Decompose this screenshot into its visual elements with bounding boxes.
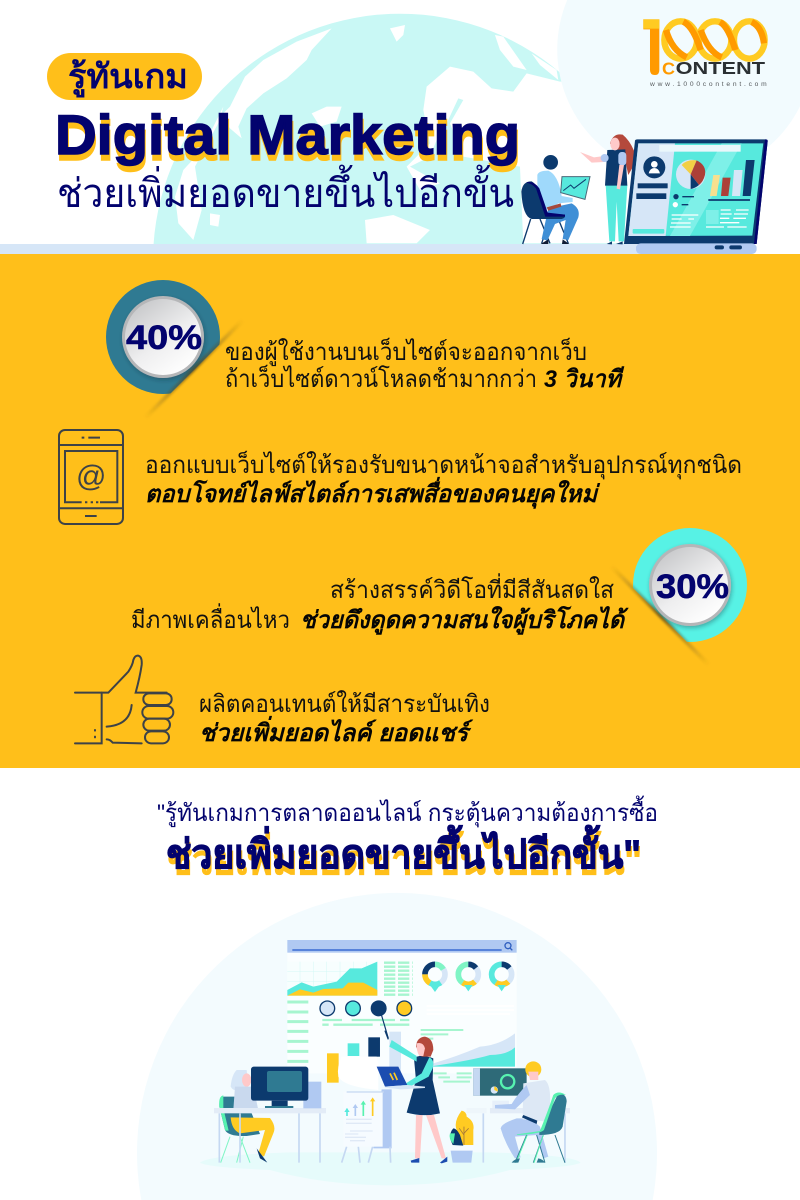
standing woman	[580, 134, 634, 244]
board backing	[287, 940, 517, 1073]
text block: 40% stat	[225, 337, 625, 393]
icon: smartphone with at sign	[59, 430, 123, 524]
title: Digital Marketing: Digital Marketing	[55, 103, 520, 166]
presenter woman	[377, 1031, 447, 1163]
logo wordmark: C	[662, 59, 675, 79]
small gauges	[320, 1001, 412, 1016]
background line chart	[433, 1033, 515, 1082]
pale circle behind logo	[557, 0, 800, 178]
aqua ring	[633, 528, 747, 642]
stat badge: 30%	[611, 528, 747, 665]
percent label: 40%	[126, 319, 202, 357]
heading pill: รู้ทันเกม	[68, 58, 188, 98]
silver disc	[649, 544, 731, 626]
logo: 1000 Content	[643, 19, 767, 88]
text block: 40% stat: ถ้าเว็บไซต์ดาวน์โหลดช้ามากกว่า	[225, 364, 537, 393]
subtitle: ช่วยเพิ่มยอดขายขึ้นไปอีกขั้น	[57, 164, 514, 216]
ground shadow	[200, 1152, 581, 1185]
text block: video stat: มีภาพเคลื่อนไหว	[131, 603, 290, 634]
illustration: man and woman with laptop dashboard	[521, 134, 768, 254]
plant	[450, 1111, 474, 1163]
globe illustration	[154, 14, 646, 245]
heading pill	[47, 53, 202, 100]
title: Digital Marketing: Digital Marketing	[56, 109, 521, 172]
text block: entertaining content	[199, 690, 490, 747]
left person at desk	[214, 1067, 326, 1163]
laptop with dashboard	[624, 139, 768, 254]
stat badge: 40%	[106, 280, 243, 418]
icon: thumbs up	[75, 656, 173, 743]
icon: smartphone with at sign: @	[76, 460, 106, 493]
board search bar	[287, 940, 517, 953]
closing quote headline: ช่วยเพิ่มยอดขายขึ้นไปอีกขั้น"	[166, 825, 641, 877]
text block: video stat: สร้างสรรค์วิดีโอที่มีสีสันสดใส	[330, 573, 614, 604]
text block: 40% stat: 3 วินาที	[544, 366, 625, 393]
text block: responsive design: ตอบโจทย์ไลฟ์สไตล์การเสพสื่อของคนยุคใหม่	[145, 476, 601, 509]
dashboard board	[287, 940, 517, 1073]
seated man	[521, 155, 590, 244]
office team illustration	[200, 1031, 581, 1185]
donut charts	[425, 964, 512, 984]
background bars	[327, 1032, 401, 1088]
right person at desk	[467, 1061, 570, 1163]
logo infinity zeros	[664, 21, 765, 59]
diagonal shadow	[611, 566, 709, 665]
text block: responsive design	[145, 450, 742, 509]
flip chart	[338, 1057, 392, 1163]
text block: entertaining content: ช่วยเพิ่มยอดไลค์ ยอดแชร์	[199, 715, 474, 747]
logo: 1000 Content: ONTENT	[676, 58, 766, 78]
white text lines	[427, 1006, 514, 1014]
logo digit one	[643, 19, 659, 75]
bar list	[287, 1002, 308, 1061]
floor band	[0, 244, 640, 255]
logo url: www.1000content.com	[649, 81, 767, 88]
diagonal shadow	[145, 320, 243, 418]
text block: entertaining content: ผลิตคอนเทนต์ให้มีสาระบันเทิง	[199, 690, 490, 718]
percent label: 30%	[656, 568, 729, 606]
main yellow panel	[0, 254, 800, 768]
text lines	[384, 963, 413, 995]
text block: video stat	[131, 573, 629, 635]
text block: responsive design: ออกแบบเว็บไซต์ให้รองรับขนาดหน้าจอสำหรับอุปกรณ์ทุกชนิด	[145, 450, 742, 480]
closing quote line: "รู้ทันเกมการตลาดออนไลน์ กระตุ้นความต้องการซื้อ	[157, 795, 658, 828]
text block: video stat: ช่วยดึงดูดความสนใจผู้บริโภคได้	[300, 605, 629, 635]
donut pins	[431, 985, 506, 992]
pointer stick	[380, 1010, 388, 1038]
silver disc	[122, 296, 204, 378]
closing quote headline: ช่วยเพิ่มยอดขายขึ้นไปอีกขั้น"	[167, 831, 642, 883]
pale circle behind team illustration	[137, 893, 657, 1200]
text block: 40% stat: ของผู้ใช้งานบนเว็บไซต์จะออกจากเว็บ	[225, 337, 587, 367]
area chart	[287, 962, 377, 996]
teal ring	[106, 280, 220, 394]
